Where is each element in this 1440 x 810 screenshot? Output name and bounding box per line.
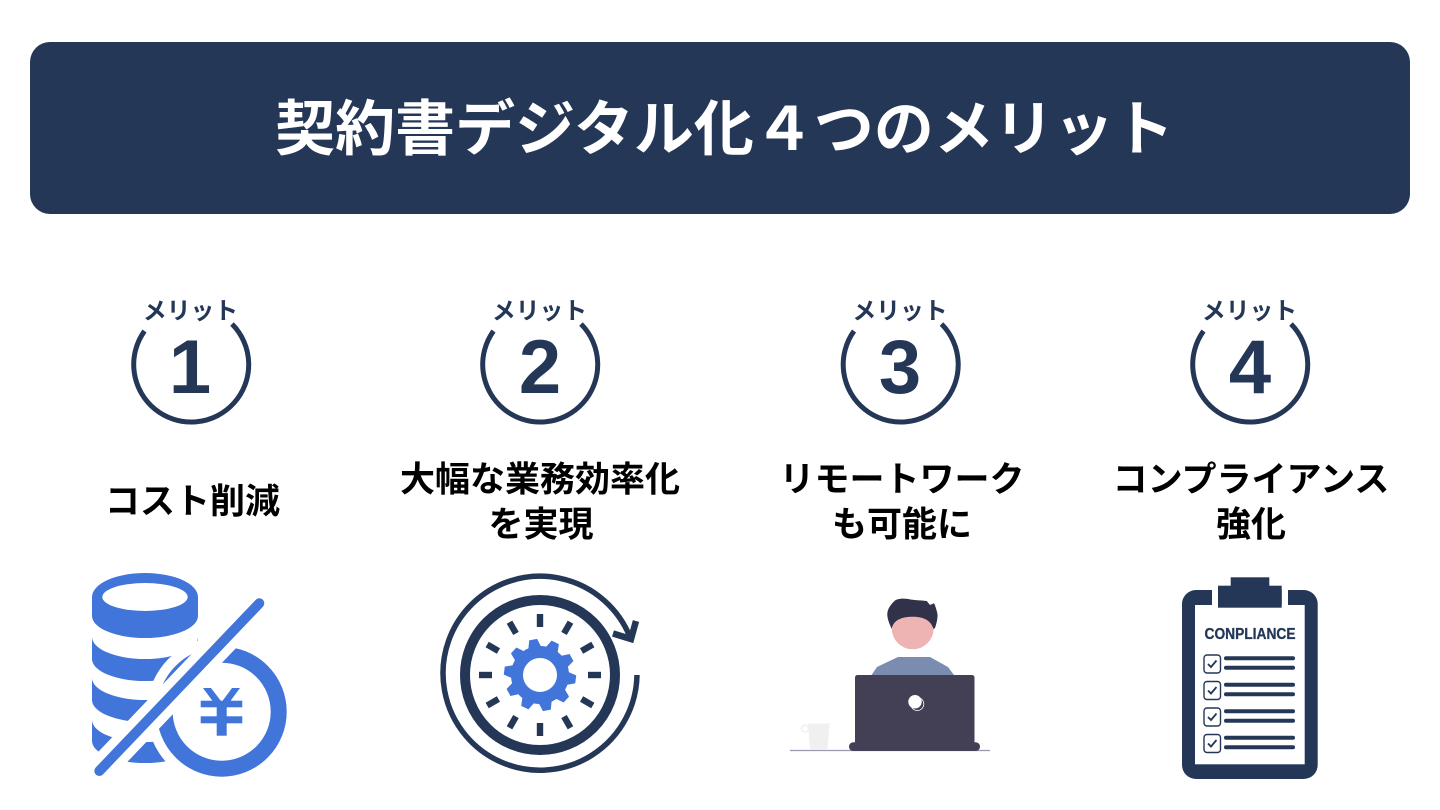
badge: merit 2: 2 bbox=[519, 325, 561, 410]
label: merit 4: 強化 bbox=[1216, 506, 1286, 544]
panel: merit 4 bbox=[1113, 298, 1389, 779]
label: merit 4: コンプライアンス bbox=[1113, 460, 1389, 500]
badge: merit 1: 1 bbox=[169, 325, 211, 410]
icon: compliance clipboard: CONPLIANCE bbox=[1204, 626, 1296, 643]
title banner bbox=[30, 42, 1410, 214]
icon: person at laptop bbox=[790, 599, 990, 751]
badge: merit 2: メリット bbox=[492, 298, 587, 325]
panel: merit 1 bbox=[85, 298, 297, 787]
panel: merit 3 bbox=[779, 298, 1025, 751]
badge: merit 2 bbox=[483, 298, 598, 422]
badge: merit 3: メリット bbox=[852, 298, 948, 325]
label: merit 3 bbox=[779, 460, 1025, 544]
label: merit 1: コスト削減 bbox=[105, 482, 280, 522]
badge: merit 3: 3 bbox=[879, 325, 921, 410]
icon: gear with cycle arrow bbox=[443, 576, 637, 770]
badge: merit 4: メリット bbox=[1202, 298, 1297, 325]
label: merit 2: 大幅な業務効率化 bbox=[400, 460, 680, 500]
label: merit 2 bbox=[400, 460, 680, 544]
panel: merit 2 bbox=[400, 298, 680, 770]
label: merit 2: を実現 bbox=[488, 506, 594, 544]
badge: merit 1 bbox=[134, 298, 249, 422]
label: merit 3: も可能に bbox=[832, 506, 972, 544]
title: 契約書デジタル化４つのメリット bbox=[275, 96, 1174, 163]
icon: compliance clipboard bbox=[1182, 577, 1318, 779]
badge: merit 4: 4 bbox=[1229, 325, 1271, 410]
label: merit 4 bbox=[1113, 460, 1389, 544]
icon: coins with yen and slash bbox=[85, 573, 297, 787]
label: merit 3: リモートワーク bbox=[779, 460, 1025, 500]
badge: merit 3 bbox=[843, 298, 958, 422]
badge: merit 1: メリット bbox=[143, 298, 238, 325]
badge: merit 4 bbox=[1193, 298, 1308, 422]
